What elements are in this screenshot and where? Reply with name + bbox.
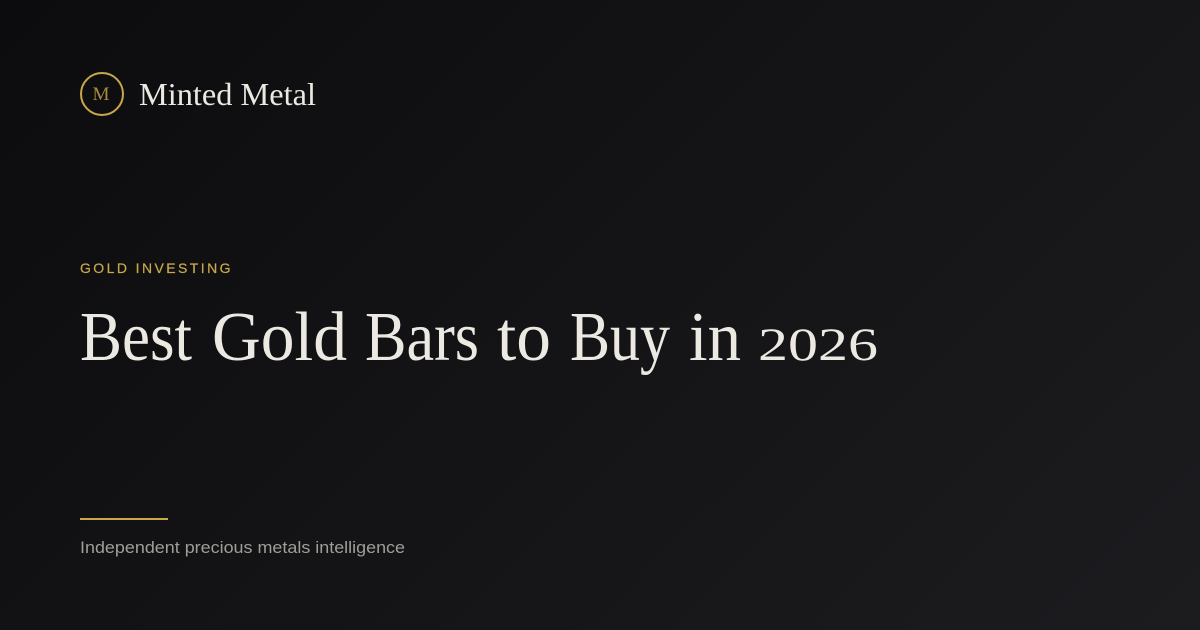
brand logo lockup [81, 73, 316, 115]
icon: gold circle monogram [81, 73, 123, 115]
title [80, 299, 878, 376]
gold divider [80, 518, 168, 520]
title: Bars [365, 299, 479, 376]
title: Gold [212, 299, 347, 376]
icon: gold circle monogram: M [92, 84, 110, 105]
title: to [497, 299, 551, 376]
category label: GOLD INVESTING [80, 260, 230, 276]
title: Best [80, 299, 192, 376]
title: in [689, 299, 741, 376]
brand name: Minted Metal [139, 76, 316, 112]
tagline: Independent precious metals intelligence [80, 539, 405, 557]
title: 2026 [758, 319, 878, 371]
title: Buy [570, 299, 670, 376]
